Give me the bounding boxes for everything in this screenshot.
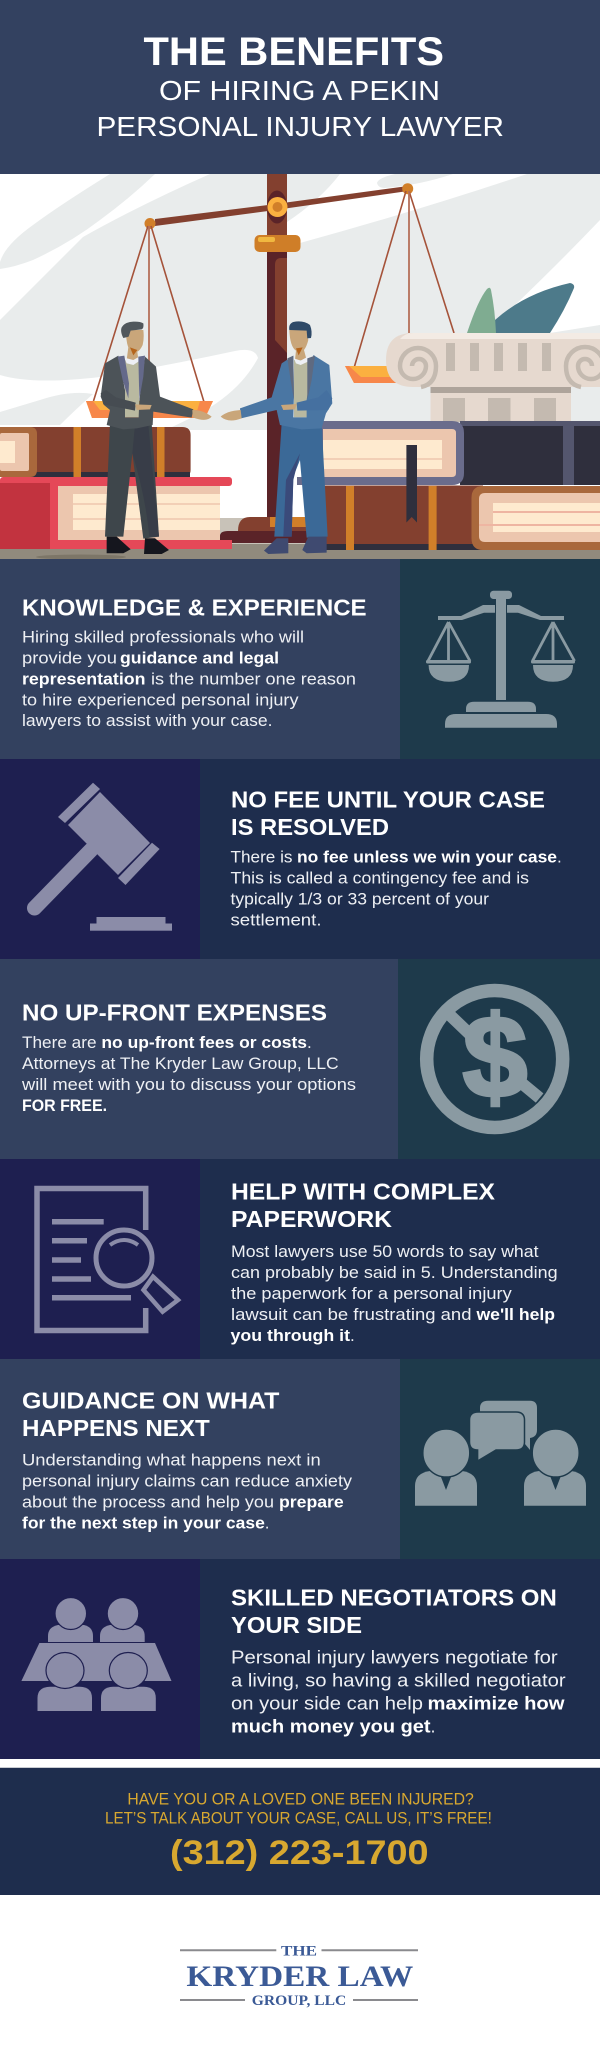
title: OF HIRING A PEKIN (159, 75, 440, 106)
body text: we'll help (475, 1305, 555, 1324)
heading: NO FEE UNTIL YOUR CASE (231, 786, 545, 812)
figure: lawyer in grey suit (101, 322, 212, 554)
heading: IS RESOLVED (231, 814, 389, 840)
body text: personal injury claims can reduce anxiety (22, 1472, 353, 1490)
call to action text: HAVE YOU OR A LOVED ONE BEEN INJURED? (127, 1789, 474, 1808)
background swooshes (0, 174, 600, 430)
panel: no fee until your case is resolved (0, 759, 600, 959)
heading (231, 786, 545, 840)
body text: no fee unless we win your case (297, 848, 557, 866)
logo: The Kryder Law Group, LLC (180, 1944, 418, 2009)
panel: illustration of two lawyers, scales and books (0, 174, 600, 560)
heading (22, 1388, 280, 1441)
body text (21, 1033, 356, 1115)
body text: for the next step in your case (22, 1514, 265, 1532)
title: PERSONAL INJURY LAWYER (96, 111, 504, 142)
heading (231, 1178, 495, 1232)
left scale pan (86, 401, 213, 418)
panel: no up-front expenses (0, 959, 600, 1159)
heading: NO UP-FRONT EXPENSES (22, 999, 327, 1025)
body text: you through it (230, 1326, 350, 1345)
panel: title header (0, 0, 600, 174)
body text: Hiring skilled professionals who will (22, 627, 304, 646)
body text (230, 1242, 558, 1345)
body text: representation (22, 669, 146, 688)
body text: Personal injury lawyers negotiate for (231, 1648, 558, 1668)
icon: balance scale (426, 591, 575, 728)
panel: knowledge and experience (0, 559, 600, 759)
heading: HAPPENS NEXT (22, 1415, 210, 1441)
body text: to hire experienced personal injury (22, 690, 299, 709)
icon: people at negotiating table (21, 1598, 172, 1711)
floor (0, 543, 600, 559)
title (96, 30, 504, 142)
body text: . (265, 1514, 270, 1532)
panel: guidance on what happens next (0, 1359, 600, 1559)
logo: The Kryder Law Group, LLC: THE (281, 1944, 317, 1960)
heading: SKILLED NEGOTIATORS ON (231, 1585, 557, 1611)
heading: PAPERWORK (231, 1206, 392, 1232)
body text: . (350, 1326, 355, 1345)
title: THE BENEFITS (144, 30, 444, 74)
body text: typically 1/3 or 33 percent of your (230, 890, 489, 908)
heading: YOUR SIDE (231, 1612, 362, 1638)
icon: gavel (34, 783, 172, 931)
icon: no dollar sign: $ (463, 992, 527, 1122)
body text (22, 627, 356, 730)
stack of books, right (297, 421, 600, 550)
body text: the paperwork for a personal injury (231, 1284, 512, 1303)
figure: lawyer in blue suit (221, 321, 332, 554)
body text: . (430, 1717, 436, 1737)
body text: FOR FREE. (22, 1096, 107, 1115)
icon: no dollar sign (427, 990, 563, 1128)
body text: lawsuit can be frustrating and (231, 1305, 472, 1324)
heading: HELP WITH COMPLEX (231, 1178, 495, 1204)
column capital (386, 333, 600, 422)
call to action text (105, 1789, 492, 1827)
body text: There is (230, 848, 292, 866)
body text: There are (22, 1033, 96, 1052)
panel: skilled negotiators on your side (0, 1559, 600, 1759)
body text: no up-front fees or costs (101, 1033, 307, 1052)
plants behind column (467, 283, 574, 333)
heading: KNOWLEDGE & EXPERIENCE (22, 595, 367, 621)
logo: The Kryder Law Group, LLC: KRYDER LAW (186, 1960, 413, 1993)
stack of books, left (0, 427, 232, 549)
phone number: (312) 223-1700 (170, 1834, 429, 1872)
body text: settlement. (230, 910, 322, 930)
body text (22, 1450, 353, 1532)
panel: help with complex paperwork (0, 1159, 600, 1359)
body text: . (557, 848, 562, 866)
body text: prepare (279, 1492, 344, 1512)
body text: guidance and legal (120, 648, 279, 667)
body text: will meet with you to discuss your options (21, 1075, 356, 1094)
body text (230, 848, 562, 930)
body text: about the process and help you (22, 1492, 274, 1512)
body text: Attorneys at The Kryder Law Group, LLC (22, 1054, 339, 1073)
right scale pan (345, 366, 390, 383)
body text: This is called a contingency fee and is (230, 868, 529, 888)
body text (231, 1648, 566, 1737)
body text: is the number one reason (151, 669, 356, 688)
body text: lawyers to assist with your case. (22, 711, 272, 730)
icon: two people in conversation (415, 1401, 586, 1506)
body text: Most lawyers use 50 words to say what (231, 1242, 539, 1261)
body text: on your side can help (231, 1694, 423, 1714)
call to action text: LET’S TALK ABOUT YOUR CASE, CALL US, IT’S FREE! (105, 1808, 492, 1827)
icon: document with magnifying glass (37, 1188, 178, 1330)
body text: a living, so having a skilled negotiator (231, 1671, 566, 1691)
body text: can probably be said in 5. Understanding (231, 1263, 558, 1282)
body text: much money you get (231, 1717, 431, 1737)
heading (231, 1585, 557, 1638)
body text: Understanding what happens next in (22, 1450, 321, 1470)
giant scale (86, 174, 454, 543)
scale wooden base (238, 517, 310, 531)
heading: GUIDANCE ON WHAT (22, 1388, 280, 1414)
body text: . (307, 1033, 312, 1052)
body text: provide you (22, 648, 117, 667)
panel: call to action (0, 1767, 600, 1895)
logo: The Kryder Law Group, LLC: GROUP, LLC (252, 1993, 346, 2009)
body text: maximize how (428, 1694, 566, 1714)
